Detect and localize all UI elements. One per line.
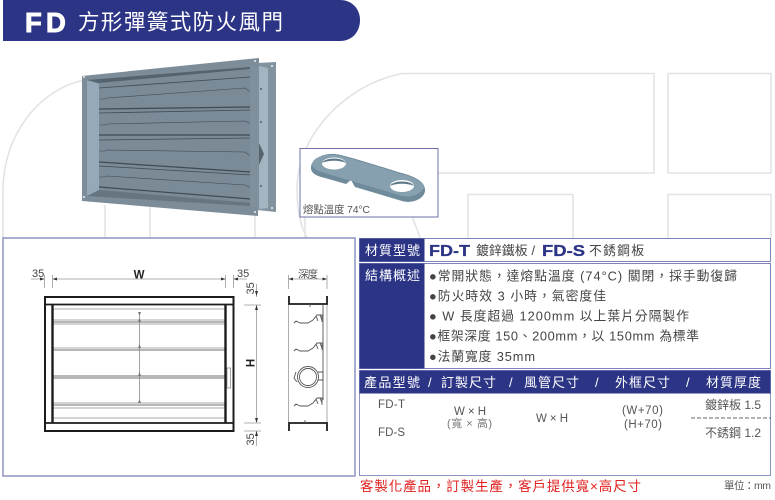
dimension: width <box>31 268 249 288</box>
panel: structure overview: 結構概述 <box>365 268 420 283</box>
panel: structure overview: ●防火時效 3 小時，氣密度佳 <box>429 288 606 304</box>
panel: structure overview: ●常開狀態，達熔點溫度 (74°C) 關閉，採手動復歸 <box>429 268 737 284</box>
table body <box>378 397 771 440</box>
panel: structure overview <box>360 264 770 368</box>
panel: material model: FD-T <box>429 243 470 260</box>
table body: (寬 × 高) <box>447 416 492 430</box>
table body: 不銹鋼 1.2 <box>705 425 761 440</box>
table header: 產品型號 <box>364 375 420 390</box>
illustration: fire damper <box>82 58 276 216</box>
title banner <box>3 0 360 41</box>
table header: / <box>428 375 432 390</box>
table body: W × H <box>536 413 568 425</box>
table header <box>360 370 770 394</box>
table body: (W+70) <box>622 405 663 417</box>
dimension: height: H <box>246 359 258 367</box>
panel: material model: FD-S <box>542 243 585 260</box>
table header: 風管尺寸 <box>524 375 579 390</box>
table body: FD-S <box>378 427 405 439</box>
front view of damper <box>45 297 234 431</box>
table body: (H+70) <box>624 419 662 431</box>
note: custom-made product: 客製化產品，訂製生產，客戶提供寬×高尺寸 <box>360 478 641 494</box>
dimension: height: 35 <box>245 433 257 446</box>
icon: fusible link <box>311 154 425 202</box>
panel: material model: 材質型號 <box>365 243 420 258</box>
note: unit: 單位：mm <box>724 479 771 492</box>
dimension: width: W <box>134 270 145 282</box>
panel: structure overview: ●法蘭寬度 35mm <box>429 349 535 364</box>
table header: 訂製尺寸 <box>441 375 496 390</box>
table header: / <box>686 375 690 390</box>
table header: / <box>595 375 599 390</box>
panel: material model: 不銹鋼板 <box>589 243 644 258</box>
title banner: F <box>25 7 42 38</box>
title banner: 方形彈簧式防火風門 <box>78 10 283 34</box>
dimension: height <box>244 282 261 446</box>
title banner: D <box>46 7 66 38</box>
table header: / <box>509 375 513 390</box>
table body: FD-T <box>378 399 405 411</box>
panel: structure overview: ●框架深度 150、200mm，以 150mm 為標準 <box>429 328 699 344</box>
panel: material model: 鍍鋅鐵板 / <box>476 243 535 258</box>
table body: W × H <box>454 406 486 418</box>
table header: 外框尺寸 <box>615 375 670 390</box>
section view with depth: 深度 <box>298 268 318 280</box>
table header: 材質厚度 <box>706 375 761 390</box>
section view with depth <box>288 268 327 431</box>
dimension: width: 35 <box>237 268 249 280</box>
panel: structure overview: ● W 長度超過 1200mm 以上葉片分隔製作 <box>429 308 689 324</box>
dimension: height: 35 <box>245 282 257 294</box>
callout: fusible link <box>300 148 438 217</box>
panel: material model <box>360 238 770 262</box>
panel: dimension drawing <box>3 238 355 476</box>
table body: 鍍鋅板 1.5 <box>705 397 761 412</box>
panel: product table <box>360 370 771 476</box>
dimension: width: 35 <box>32 268 44 280</box>
callout: fusible link: 熔點溫度 74°C <box>303 203 370 216</box>
